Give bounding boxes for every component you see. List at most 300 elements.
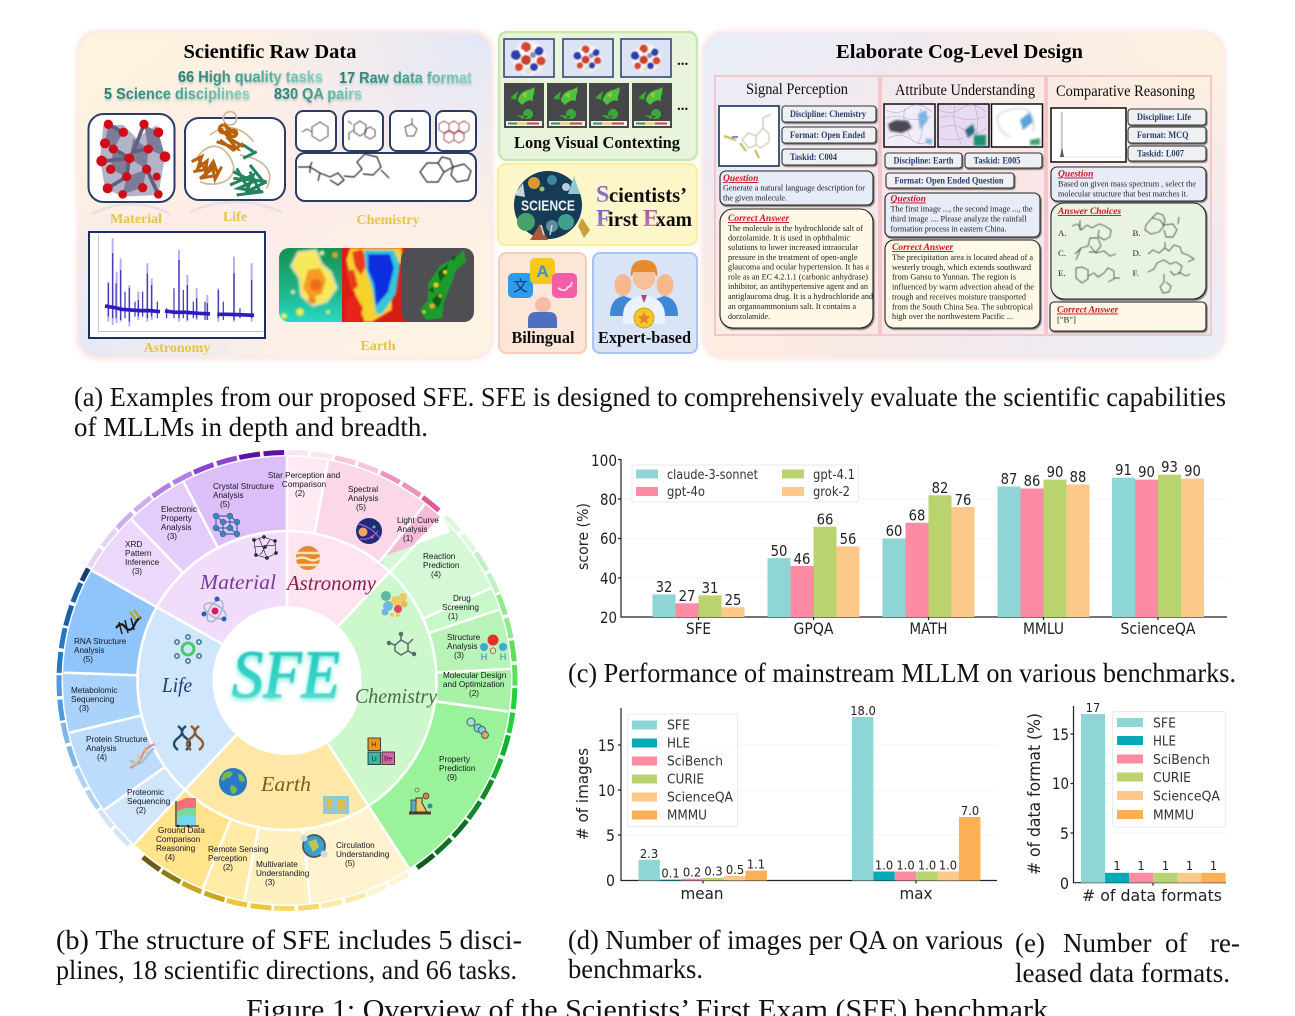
bar chart (e): data formats	[1025, 701, 1226, 905]
legend: grok-2	[813, 484, 850, 500]
discipline: Chemistry: Chemistry	[355, 684, 438, 708]
legend	[1113, 712, 1226, 827]
question box: The first image ..., the second image ..., the	[890, 204, 1033, 214]
heading: Signal Perception: Signal Perception	[746, 81, 848, 98]
value labels: 1.0	[896, 858, 915, 873]
stats text	[104, 69, 473, 103]
panel: Scientists' First Exam	[498, 164, 697, 245]
correct answer box: Correct Answer	[1057, 306, 1118, 316]
value labels: 0.5	[726, 863, 744, 877]
caption (a): (a) Examples from our proposed SFE. SFE is designed to comprehensively evaluate the scientific capabilities	[74, 382, 1226, 412]
image row: radar frames	[504, 83, 688, 128]
value labels: 66	[817, 512, 833, 529]
legend: ScienceQA	[1153, 788, 1221, 804]
icon: water molecule: H	[500, 652, 506, 662]
value labels: 88	[1070, 469, 1086, 486]
value labels: 1	[1186, 859, 1193, 873]
y axis: 20	[600, 608, 617, 627]
column: Signal Perception	[715, 76, 879, 335]
tags	[1128, 109, 1206, 161]
value labels: 90	[1047, 464, 1063, 481]
task labels: (9)	[447, 773, 457, 782]
discipline: Life: Life	[161, 673, 192, 697]
icon: water molecule: H	[481, 652, 487, 662]
dashed rim	[0, 358, 609, 1003]
value labels: 91	[1115, 462, 1132, 479]
bar chart (d): images per QA	[573, 704, 997, 903]
tags	[885, 153, 1042, 188]
answer choices box: C.	[1058, 248, 1066, 258]
answer choices box: D.	[1132, 248, 1141, 258]
title: Scientists' First Exam: xam	[656, 207, 692, 231]
y axis title: score (%)	[574, 503, 592, 570]
title: Scientists' First Exam: E	[643, 206, 659, 232]
column: Comparative Reasoning	[1047, 76, 1211, 335]
task labels: (3)	[265, 878, 275, 887]
value labels: 86	[1024, 473, 1040, 490]
legend: HLE	[1153, 734, 1176, 750]
answer choices box: E.	[1058, 268, 1066, 278]
value labels: 2.3	[640, 847, 658, 861]
task labels: (3)	[132, 567, 142, 576]
value labels	[640, 704, 979, 881]
value labels: 68	[909, 508, 925, 525]
x tick labels: GPQA	[794, 619, 834, 638]
y axis: 40	[600, 569, 617, 588]
tags: Discipline: Chemistry	[790, 110, 866, 120]
value labels	[1086, 701, 1217, 873]
task labels: Reaction	[423, 552, 456, 561]
x tick labels: ScienceQA	[1120, 619, 1196, 638]
caption (b): (b) The structure of SFE includes 5 disci-	[56, 925, 522, 955]
task labels: Pattern	[125, 549, 152, 558]
value labels: 76	[955, 492, 971, 509]
task labels: Analysis	[213, 491, 244, 500]
correct answer box: dorzolamide. It is used in ophthalmic	[728, 232, 850, 242]
task labels: Prediction	[423, 561, 460, 570]
discipline: Material: Material	[199, 570, 276, 594]
icon: languages and person: 文	[513, 275, 528, 296]
icon: languages and person	[508, 258, 577, 328]
title: Scientists' First Exam: irst	[608, 207, 638, 231]
icon: science globe	[514, 171, 590, 240]
value labels: 1.0	[918, 858, 936, 873]
wheel chart: SFE structure	[0, 358, 609, 1003]
icon: hexagon cluster	[381, 591, 408, 617]
task labels: XRD	[125, 540, 142, 549]
x tick labels	[686, 619, 1196, 638]
value labels: 90	[1138, 464, 1155, 481]
value labels: 18.0	[850, 704, 876, 718]
correct answer box: dorzolamide.	[728, 311, 770, 321]
legend	[632, 465, 858, 502]
bars	[1081, 714, 1226, 883]
task labels: Sequencing	[71, 695, 115, 704]
value labels: 90	[1184, 463, 1201, 480]
question box: molecular structure that best matches it.	[1058, 188, 1188, 198]
value labels: 32	[656, 579, 672, 596]
task labels: Comparison	[282, 480, 327, 489]
question box: third image .... Please analyze the rainfall	[890, 214, 1027, 224]
image: material crystal structure	[88, 114, 174, 214]
icon: galaxy planet	[356, 518, 382, 544]
task labels: Inference	[125, 558, 160, 567]
task labels: and Optimization	[443, 680, 505, 689]
task labels: (3)	[454, 651, 464, 660]
heading: Comparative Reasoning: Comparative Reasoning	[1056, 83, 1195, 100]
y axis title: # of data format (%)	[1025, 713, 1044, 875]
stats text: 830 QA pairs	[274, 86, 362, 103]
label: Material: Material	[110, 212, 162, 227]
value labels: 60	[886, 523, 902, 540]
label: Earth: Earth	[360, 339, 396, 354]
task labels: (2)	[223, 863, 233, 872]
tags: Format: Open Ended	[790, 131, 866, 141]
value labels: 1.0	[875, 858, 893, 873]
bars	[652, 478, 1135, 617]
correct answer box: glaucoma and ocular hypertension. It has a	[728, 262, 869, 272]
task labels: Star Perception and	[268, 471, 341, 480]
icon: crystal cell	[214, 514, 240, 536]
correct answer box: an organoammonium salt. It contains a	[728, 301, 856, 311]
legend: SFE	[667, 718, 690, 734]
x tick labels	[680, 884, 932, 903]
task labels: Proteomic	[127, 788, 164, 797]
discipline: Astronomy: Astronomy	[285, 571, 377, 595]
tags: Discipline: Earth	[894, 156, 954, 166]
correct answer box: role as an EC 4.2.1.1 (carbonic anhydrase)	[728, 272, 868, 282]
image row: protein surfaces: ...	[677, 53, 688, 69]
y axis: 80	[600, 490, 617, 509]
caption (b): plines, 18 scientific directions, and 66 tasks.	[56, 955, 517, 985]
correct answer box: westerly trough, which extends southward	[892, 262, 1032, 272]
task labels: Ground Data	[158, 826, 205, 835]
x tick labels: MMLU	[1023, 619, 1064, 638]
task labels: Drug	[453, 594, 471, 603]
y axis: 60	[600, 529, 617, 548]
icon: DNA helix	[130, 744, 155, 768]
question box: the given molecule.	[723, 192, 787, 202]
value labels: 93	[1161, 459, 1178, 476]
title: Scientists' First Exam: S	[596, 182, 609, 208]
question box	[720, 171, 873, 205]
y tick labels	[598, 736, 615, 890]
icon: circulation globe	[300, 834, 328, 858]
caption (b)	[56, 925, 522, 985]
value labels: 82	[932, 480, 948, 497]
correct answer box: solutions to lower increased intraocular	[728, 242, 858, 252]
y axis title: # of images	[573, 748, 592, 840]
caption (d): (d) Number of images per QA on various	[568, 925, 1003, 955]
value labels: 1	[1162, 859, 1169, 873]
value labels: 87	[1001, 471, 1017, 488]
task labels: Electronic	[161, 505, 197, 514]
icon: DNA pair	[174, 726, 203, 750]
task labels: (1)	[448, 612, 458, 621]
correct answer box: inhibitor, an antihypertensive agent and an	[728, 281, 869, 291]
caption (e): leased data formats.	[1015, 958, 1230, 988]
value labels: 1	[1210, 859, 1217, 873]
correct answer box: The precipitation area is located ahead of a	[892, 252, 1033, 262]
icon: globe	[219, 768, 247, 796]
task labels: Analysis	[348, 494, 378, 503]
question box: formation process in eastern China.	[890, 224, 1006, 234]
label: Long Visual Contexting: Long Visual Contexting	[514, 133, 681, 152]
task labels: Protein Structure	[86, 735, 148, 744]
image: mass spectrum	[1051, 108, 1126, 162]
y tick labels	[1052, 725, 1069, 893]
answer choices box: A.	[1058, 228, 1067, 238]
correct answer box: antiglaucoma drug. It is a hydrochloride and	[728, 291, 874, 301]
task labels: Prediction	[439, 764, 476, 773]
caption (a): of MLLMs in depth and breadth.	[74, 412, 428, 442]
legend: ScienceQA	[667, 790, 734, 806]
icon: periodic elements: Li	[371, 756, 377, 762]
value labels: 50	[771, 543, 787, 560]
icon: periodic elements	[368, 738, 394, 764]
question box: Question	[723, 174, 758, 184]
tags: Taskid: C004	[790, 153, 837, 163]
task labels: (5)	[220, 500, 230, 509]
legend	[628, 714, 738, 826]
icon: flask	[409, 788, 432, 813]
panel: Long Visual Contexting	[499, 32, 697, 160]
task labels: (4)	[97, 753, 107, 762]
y tick labels: 0	[1060, 874, 1069, 893]
icon: languages and person: A	[536, 262, 549, 281]
question box: Generate a natural language description for	[723, 182, 865, 192]
task labels: Screening	[442, 603, 479, 612]
legend: MMMU	[1153, 808, 1194, 824]
legend: SFE	[1153, 716, 1176, 732]
stats text: 5 Science disciplines	[104, 86, 250, 103]
title: Scientists' First Exam: cientists’	[609, 183, 687, 207]
panel: Elaborate Cog-Level Design	[701, 30, 1226, 360]
heading: Scientific Raw Data: Scientific Raw Data	[184, 41, 356, 63]
caption (e): (e)	[1015, 928, 1045, 958]
column: Attribute Understanding	[881, 76, 1045, 335]
value labels: 46	[794, 551, 810, 568]
panel: Scientific Raw Data	[76, 30, 494, 360]
value labels	[656, 459, 1201, 609]
task labels: Analysis	[86, 744, 116, 753]
x tick labels: mean	[680, 884, 724, 903]
value labels: 0.3	[704, 864, 723, 879]
correct answer box	[1050, 302, 1206, 331]
icon: lattice	[252, 536, 278, 560]
question box: Based on given mass spectrum , select the	[1058, 178, 1196, 188]
task labels: (5)	[356, 503, 366, 512]
icon: hexagon chain	[467, 718, 488, 738]
value labels: 0.1	[661, 866, 680, 881]
value labels: 7.0	[961, 804, 979, 818]
y tick labels: 15	[598, 736, 615, 755]
value labels: 56	[840, 531, 856, 548]
centre label: SFE: SFE	[232, 636, 340, 712]
caption (e): Number	[1063, 928, 1151, 958]
icon: water molecule: O	[489, 646, 497, 656]
task labels: Comparison	[156, 835, 201, 844]
value labels: 27	[679, 588, 695, 605]
value labels: 1	[1113, 859, 1121, 873]
tags	[782, 106, 876, 165]
answer choices box: Answer Choices	[1057, 207, 1121, 217]
legend: CURIE	[1153, 770, 1191, 786]
y tick labels: 15	[1052, 725, 1069, 744]
caption (e)	[1015, 928, 1240, 988]
y tick labels: 10	[1052, 774, 1069, 793]
task labels	[71, 471, 507, 887]
correct answer box: Correct Answer	[892, 243, 953, 253]
value labels: 17	[1086, 701, 1100, 715]
icon: atom	[202, 596, 228, 624]
task labels: Analysis	[161, 523, 192, 532]
tags: Format: Open Ended Question	[894, 176, 1004, 186]
panel: Expert-based	[593, 253, 697, 353]
task labels: Metabolomic	[71, 686, 117, 695]
image row: radar frames: ...	[677, 98, 688, 114]
stats text: 66 High quality tasks	[178, 69, 323, 86]
images: rainfall maps	[884, 104, 1042, 147]
task labels: Light Curve	[397, 516, 439, 525]
task labels: (2)	[295, 489, 305, 498]
value labels: 1.0	[939, 858, 957, 873]
text: SCIENCE: SCIENCE	[521, 198, 575, 214]
chart image: astronomy spectrum	[89, 232, 265, 338]
x tick labels: max	[900, 884, 932, 903]
bar chart (c): performance on benchmarks	[574, 451, 1227, 638]
task labels: (5)	[83, 655, 93, 664]
task labels: Reasoning	[156, 844, 196, 853]
icon: area chart	[176, 798, 199, 827]
task labels: Analysis	[397, 525, 428, 534]
icon: cell network	[175, 635, 201, 663]
task labels: Molecular Design	[443, 671, 507, 680]
question box: Question	[890, 194, 926, 204]
icon: periodic elements: Be	[384, 756, 392, 762]
task labels: Multivariate	[256, 860, 298, 869]
icon: experts with medal	[610, 260, 678, 328]
answer choices box: B.	[1132, 228, 1141, 238]
icon: Jupiter	[296, 546, 320, 570]
y axis	[591, 451, 617, 627]
outer ring: tasks	[23, 416, 551, 945]
correct answer box	[885, 240, 1040, 328]
x axis title: # of data formats	[1082, 886, 1222, 905]
inner ring: disciplines	[128, 521, 446, 840]
value labels: 1.1	[747, 857, 765, 872]
icon: periodic elements: H	[372, 742, 377, 748]
legend: MMMU	[667, 808, 707, 824]
title: Scientists' First Exam: F	[596, 206, 611, 232]
icon: ball and stick molecule	[388, 632, 416, 656]
value labels: 31	[702, 580, 718, 597]
label: Life: Life	[223, 210, 247, 225]
y axis: 100	[591, 451, 617, 470]
legend: SciBench	[667, 754, 723, 770]
image: life protein structure	[185, 112, 285, 212]
task labels: (1)	[403, 534, 413, 543]
x tick labels: MATH	[910, 619, 948, 638]
task labels: (2)	[136, 806, 146, 815]
stats text: 17 Raw data format	[339, 70, 473, 87]
legend: HLE	[667, 736, 690, 752]
image: earth weather maps	[279, 248, 474, 322]
correct answer box: The molecule is the hydrochloride salt of	[728, 223, 863, 233]
caption (d)	[568, 925, 1003, 984]
task labels: Analysis	[74, 646, 104, 655]
title: Scientists' First Exam	[596, 182, 692, 232]
task labels: (3)	[167, 532, 177, 541]
task labels: Understanding	[256, 869, 310, 878]
task labels: Perception	[208, 854, 248, 863]
label: Chemistry: Chemistry	[356, 213, 420, 228]
bars	[638, 717, 980, 880]
label: Bilingual: Bilingual	[512, 328, 575, 347]
correct answer box: from Gansu to Yunnan. The region is	[892, 272, 1017, 282]
tags: Format: MCQ	[1137, 131, 1188, 141]
value labels: 1	[1137, 859, 1145, 873]
caption (d): benchmarks.	[568, 954, 703, 984]
task labels: Remote Sensing	[208, 845, 269, 854]
task labels: Structure	[447, 633, 481, 642]
correct answer box: Correct Answer	[728, 214, 789, 224]
icon: water molecule	[480, 634, 507, 662]
correct answer box: from the South China Sea. The subtropical	[892, 302, 1034, 312]
task labels: Analysis	[447, 642, 478, 651]
icon: map	[323, 796, 349, 814]
task labels: (3)	[79, 704, 89, 713]
correct answer box	[720, 209, 874, 328]
task labels: (4)	[431, 570, 441, 579]
caption (a)	[74, 382, 1226, 442]
value labels: 25	[725, 592, 741, 609]
image row: protein surfaces	[504, 39, 688, 77]
question box: Question	[1058, 170, 1093, 180]
answer choices box	[1051, 203, 1206, 299]
panel: Bilingual	[499, 253, 586, 353]
image: molecule	[719, 106, 779, 166]
y tick labels: 10	[598, 781, 615, 800]
correct answer box: ["B"]	[1057, 314, 1076, 324]
task labels: Crystal Structure	[213, 482, 274, 491]
image: chemistry molecules	[296, 111, 476, 201]
task labels: (2)	[469, 689, 479, 698]
y tick labels: 0	[606, 871, 615, 890]
legend: claude-3-sonnet	[667, 467, 758, 483]
y tick labels: 5	[1060, 824, 1069, 843]
task labels: Understanding	[336, 850, 390, 859]
task labels: (4)	[165, 853, 175, 862]
question box	[1051, 167, 1206, 201]
task labels: Property	[439, 755, 471, 764]
tags: Taskid: E005	[974, 156, 1021, 166]
caption (e): of	[1165, 928, 1188, 958]
legend: CURIE	[667, 772, 704, 788]
y tick labels: 5	[606, 826, 615, 845]
correct answer box: high over the northwestern Pacific ...	[892, 311, 1013, 321]
x tick labels: SFE	[686, 619, 711, 638]
answer choices box: F.	[1132, 268, 1139, 278]
label: Astronomy: Astronomy	[144, 341, 210, 356]
tags: Taskid: L007	[1137, 150, 1184, 160]
heading: Elaborate Cog-Level Design: Elaborate Cog-Level Design	[836, 41, 1083, 63]
correct answer box: pressure in the treatment of open-angle	[728, 252, 858, 262]
question box	[885, 193, 1040, 237]
task labels: Spectral	[348, 485, 378, 494]
correct answer box: influenced by warm advection ahead of the	[892, 282, 1034, 292]
correct answer box: trough and receives moisture transported	[892, 292, 1027, 302]
